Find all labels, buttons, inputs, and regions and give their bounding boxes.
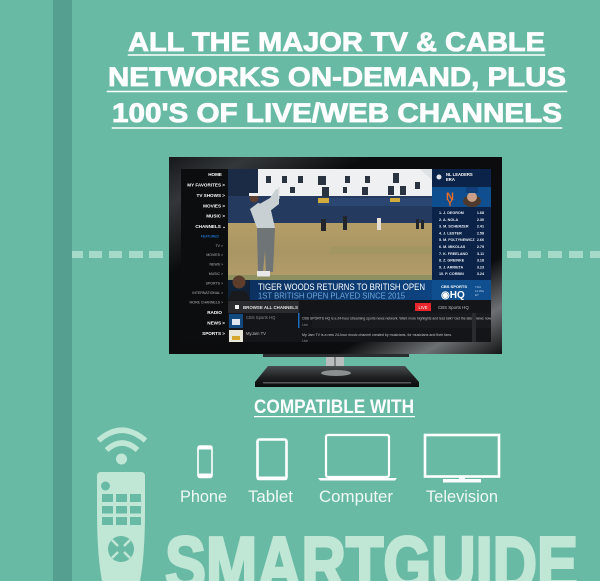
leaders panel: 3.11: [477, 252, 484, 256]
device labels: Television: [426, 487, 498, 506]
leaders panel: 2.30: [477, 218, 484, 222]
channel guide: BROWSE ALL CHANNELS: [243, 305, 298, 310]
bezel: [169, 157, 502, 354]
side menu: SPORTS >: [202, 331, 225, 336]
device labels: Computer: [319, 487, 393, 506]
channel guide: CBS SPORTS HQ is a 24-hour streaming sports news network. Want more highlights and less talk? Get the latest news now: [302, 316, 492, 320]
channel guide: Live: [302, 323, 308, 327]
channel guide: CBS Sports HQ: [438, 305, 469, 310]
title: 100'S OF LIVE/WEB CHANNELS: [112, 98, 562, 128]
side menu: SPORTS >: [206, 282, 223, 286]
leaders panel: 3.24: [477, 272, 485, 276]
headline banner: [228, 276, 491, 301]
icon: phone: [198, 446, 212, 478]
title: ALL THE MAJOR TV & CABLE: [128, 27, 545, 57]
leaders panel: ERA: [446, 177, 455, 182]
icon: computer: [318, 435, 397, 480]
side menu: INTERNATIONAL >: [192, 291, 223, 295]
device labels: Phone: [180, 487, 227, 506]
channel guide: My Jam TV is a new 24-hour music channel created by musicians, for musicians and their fans.: [302, 333, 452, 337]
side menu: FEATURED: [201, 234, 220, 238]
side menu: MUSIC >: [209, 272, 223, 276]
leaders panel: 6. M. MIKOLAS: [439, 245, 466, 249]
headline banner: ET: [475, 293, 479, 297]
device labels: Tablet: [248, 487, 293, 506]
compatible with heading: COMPATIBLE WITH: [254, 397, 414, 418]
leaders panel: N: [446, 191, 454, 203]
leaders panel: 1. J. DEGROM: [439, 211, 464, 215]
leaders panel: 2. A. NOLA: [439, 218, 458, 222]
side menu: MOVIES >: [203, 204, 225, 208]
side menu: TV SHOWS >: [197, 193, 225, 198]
leaders panel: 1.68: [477, 211, 484, 215]
icon: tablet: [257, 440, 287, 480]
headline banner: ◉HQ: [441, 290, 465, 301]
video: golf photo: [228, 169, 432, 280]
leaders panel: 8. Z. GREINKE: [439, 259, 465, 263]
icon: wifi signal: [98, 430, 146, 464]
headline banner: TIGER WOODS RETURNS TO BRITISH OPEN: [258, 282, 425, 293]
side menu: [187, 172, 226, 336]
side menu: HOME: [208, 172, 222, 177]
leaders panel: 2.41: [477, 225, 484, 229]
icon: remote control: [97, 472, 145, 581]
leaders panel: 9. J. ARRIETA: [439, 265, 464, 269]
channel guide: Live: [302, 339, 308, 343]
headline banner: 1ST BRITISH OPEN PLAYED SINCE 2015: [258, 292, 406, 300]
leaders panel: 2.58: [477, 231, 484, 235]
leaders panel: Y: [447, 198, 453, 208]
dashed line left: [72, 251, 163, 258]
golfer: [249, 187, 280, 276]
headline banner: THU: [475, 285, 481, 289]
leaders panel: 7. K. FREELAND: [439, 252, 468, 256]
channel guide: CBS Sports HQ: [246, 315, 276, 320]
television mockup: [169, 157, 502, 387]
device labels: [180, 487, 498, 506]
side menu: CHANNELS ⌄: [195, 224, 226, 229]
side menu: MORE CHANNELS >: [189, 300, 223, 304]
side menu: MOVIES >: [206, 253, 223, 257]
dashed line right: [507, 251, 600, 258]
leaders panel: [432, 169, 491, 280]
leaders panel: NL LEADERS: [446, 172, 473, 177]
leaders panel: 4. J. LESTER: [439, 231, 462, 235]
side menu: NEWS >: [209, 262, 223, 266]
screen: [181, 169, 491, 342]
leaders panel: 3.23: [477, 265, 484, 269]
side menu: NEWS >: [207, 320, 225, 326]
leaders panel: 2.79: [477, 245, 484, 249]
side menu: MUSIC >: [206, 214, 225, 218]
headline banner: 11:20a: [475, 289, 484, 293]
leaders panel: 2.66: [477, 238, 484, 242]
leaders panel: 5. M. FOLTYNEWICZ: [439, 238, 475, 242]
channel guide: MyJam TV: [246, 331, 266, 336]
leaders panel: 3. M. SCHERZER: [439, 225, 469, 229]
icon: television: [425, 435, 499, 482]
headline banner: CBS SPORTS: [441, 284, 467, 289]
channel guide: [228, 300, 492, 343]
title: [107, 27, 567, 128]
side menu: RADIO: [207, 310, 222, 315]
vertical stripe: [53, 0, 72, 581]
leaders panel: 3.18: [477, 259, 484, 263]
side menu: TV >: [216, 244, 223, 248]
title: NETWORKS ON-DEMAND, PLUS: [108, 62, 566, 92]
channel guide: LIVE: [418, 305, 428, 310]
side menu: MY FAVORITES >: [187, 182, 225, 188]
leaders panel: 10. P. CORBIN: [439, 272, 464, 276]
stand: [255, 354, 419, 387]
